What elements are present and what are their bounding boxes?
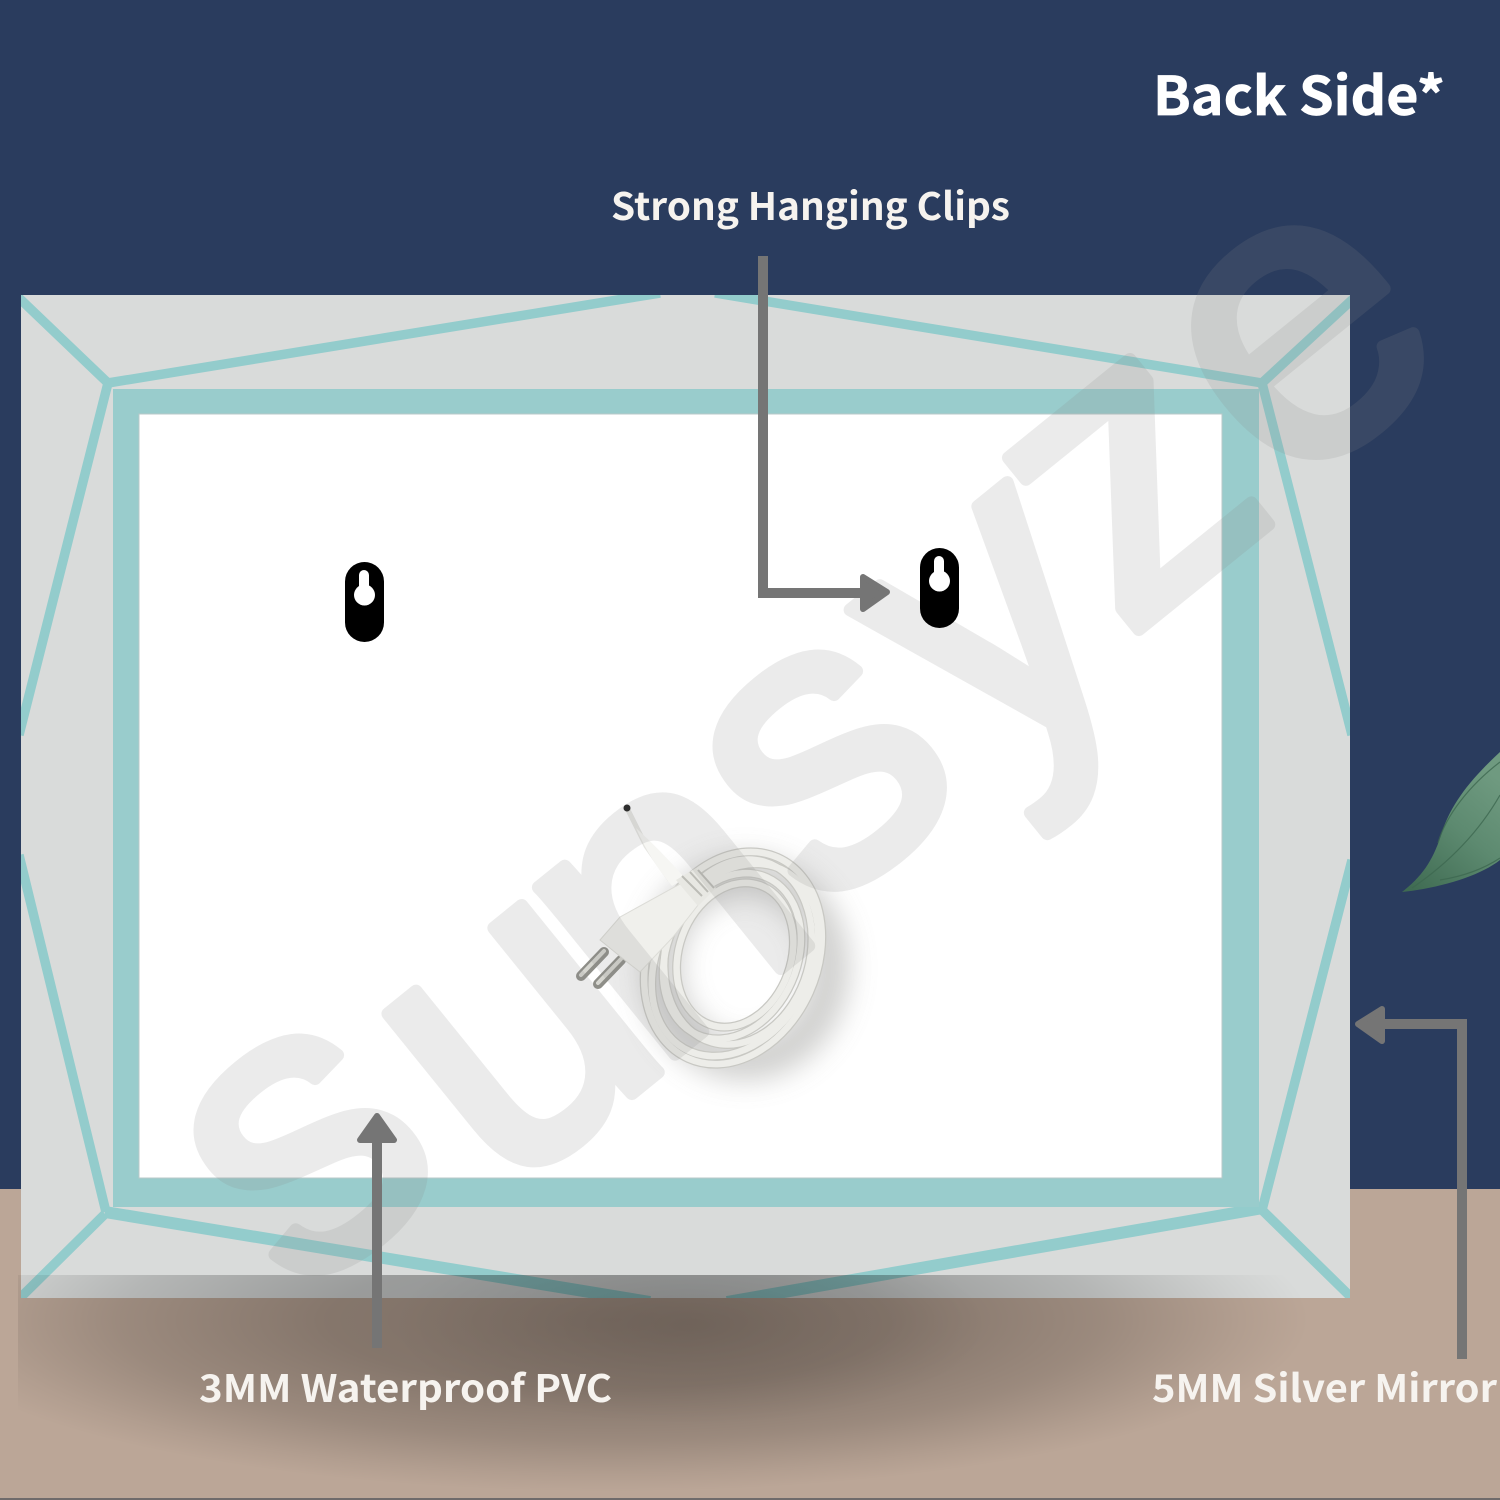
thin wire and probe tip (628, 810, 670, 880)
cable shadow (661, 876, 829, 1060)
facet lines (18, 293, 1354, 1302)
watermark: u (271, 769, 734, 1266)
label: silver mirror: 5MM Silver Mirror (1152, 1358, 1497, 1413)
plug body (600, 884, 702, 972)
PVC teal band (113, 389, 1259, 1207)
cable coil (612, 823, 854, 1093)
left hanging clip (345, 562, 384, 642)
floor (0, 1189, 1500, 1500)
right hanging clip (920, 548, 959, 628)
arrow: waterproof PVC (360, 1116, 394, 1348)
watermark: s (585, 503, 1030, 985)
watermark: s (66, 887, 511, 1369)
watermark: z (894, 226, 1339, 708)
power cable with plug (581, 804, 854, 1093)
mirror frame (18, 293, 1354, 1302)
watermark: y (753, 364, 1200, 847)
silver mirror panel (21, 295, 1350, 1298)
title: Back Side* (1153, 55, 1445, 131)
background wall (0, 0, 1500, 1189)
white backing panel (139, 414, 1222, 1178)
plug pins (581, 952, 604, 976)
arrow: silver mirror (1358, 1009, 1467, 1359)
label: strong hanging clips: Strong Hanging Clips (611, 176, 1010, 231)
label: waterproof PVC: 3MM Waterproof PVC (199, 1358, 612, 1413)
leaf (1402, 752, 1500, 892)
arrow: hanging clips (758, 256, 887, 609)
watermark: n (421, 643, 884, 1140)
strain relief (676, 868, 716, 906)
floor shadow (18, 1275, 1249, 1476)
